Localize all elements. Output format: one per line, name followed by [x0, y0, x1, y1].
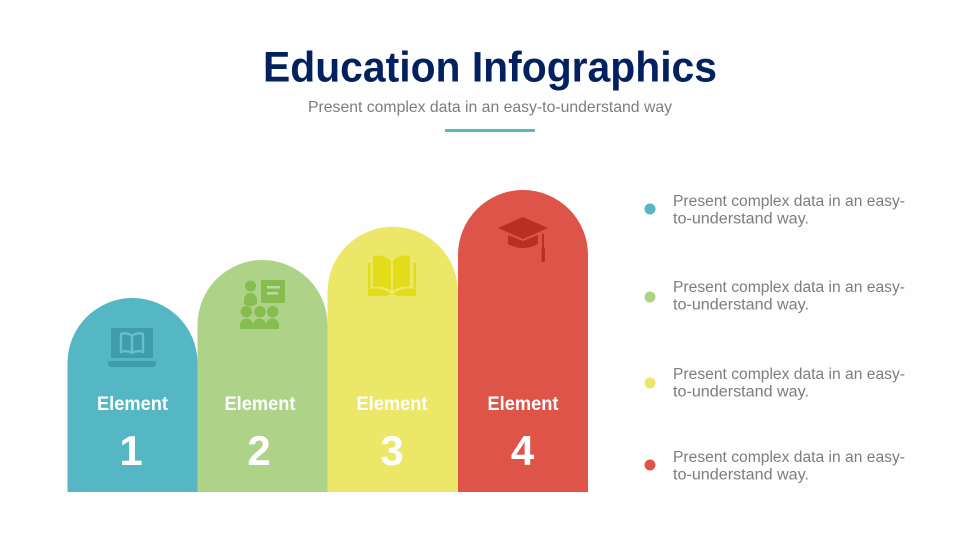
legend item 2	[644, 279, 905, 314]
legend item 4	[644, 449, 905, 484]
bar 3 number: 3	[380, 427, 404, 474]
icon: graduation cap	[498, 217, 548, 262]
header	[263, 44, 717, 132]
subtitle: Present complex data in an easy-to-understand way	[308, 99, 672, 116]
legend dot 4	[644, 460, 656, 470]
legend text 3: Present complex data in an easy-	[673, 366, 905, 383]
legend item 1	[644, 193, 905, 228]
icon: open book	[368, 256, 416, 296]
bar 3 shape	[328, 227, 458, 492]
bar 1: teal	[68, 298, 198, 492]
title: Education Infographics	[263, 44, 717, 92]
legend text 2: to-understand way.	[673, 296, 809, 314]
bar 4 shape	[458, 190, 588, 492]
legend item 3	[644, 366, 905, 400]
title underline	[445, 129, 535, 132]
legend text 1: to-understand way.	[673, 210, 809, 228]
legend	[644, 193, 905, 484]
bar 2 label: Element	[224, 394, 296, 415]
icon: laptop with book	[108, 328, 156, 367]
legend text 3: to-understand way.	[673, 384, 809, 400]
bar 1 shape	[68, 298, 198, 492]
legend text 4: Present complex data in an easy-	[673, 449, 905, 466]
bar 1 number: 1	[119, 427, 143, 474]
legend dot 3	[644, 378, 656, 388]
legend dot 1	[644, 204, 656, 214]
bar 4 label: Element	[488, 394, 559, 415]
icon: teacher and students	[240, 280, 285, 329]
bar 2 shape	[198, 260, 328, 492]
bar 2 number: 2	[247, 427, 271, 474]
legend text 4: to-understand way.	[673, 466, 809, 484]
bar 3 label: Element	[356, 394, 428, 415]
bar 2: green	[198, 260, 328, 492]
chart: rounded bars	[68, 190, 588, 492]
bar 4 number: 4	[511, 427, 535, 474]
legend text 1: Present complex data in an easy-	[673, 193, 905, 210]
bar 1 label: Element	[97, 394, 169, 415]
legend dot 2	[644, 292, 656, 302]
bar 3: yellow	[328, 227, 458, 492]
legend text 2: Present complex data in an easy-	[673, 279, 905, 296]
bar 4: red	[458, 190, 588, 492]
